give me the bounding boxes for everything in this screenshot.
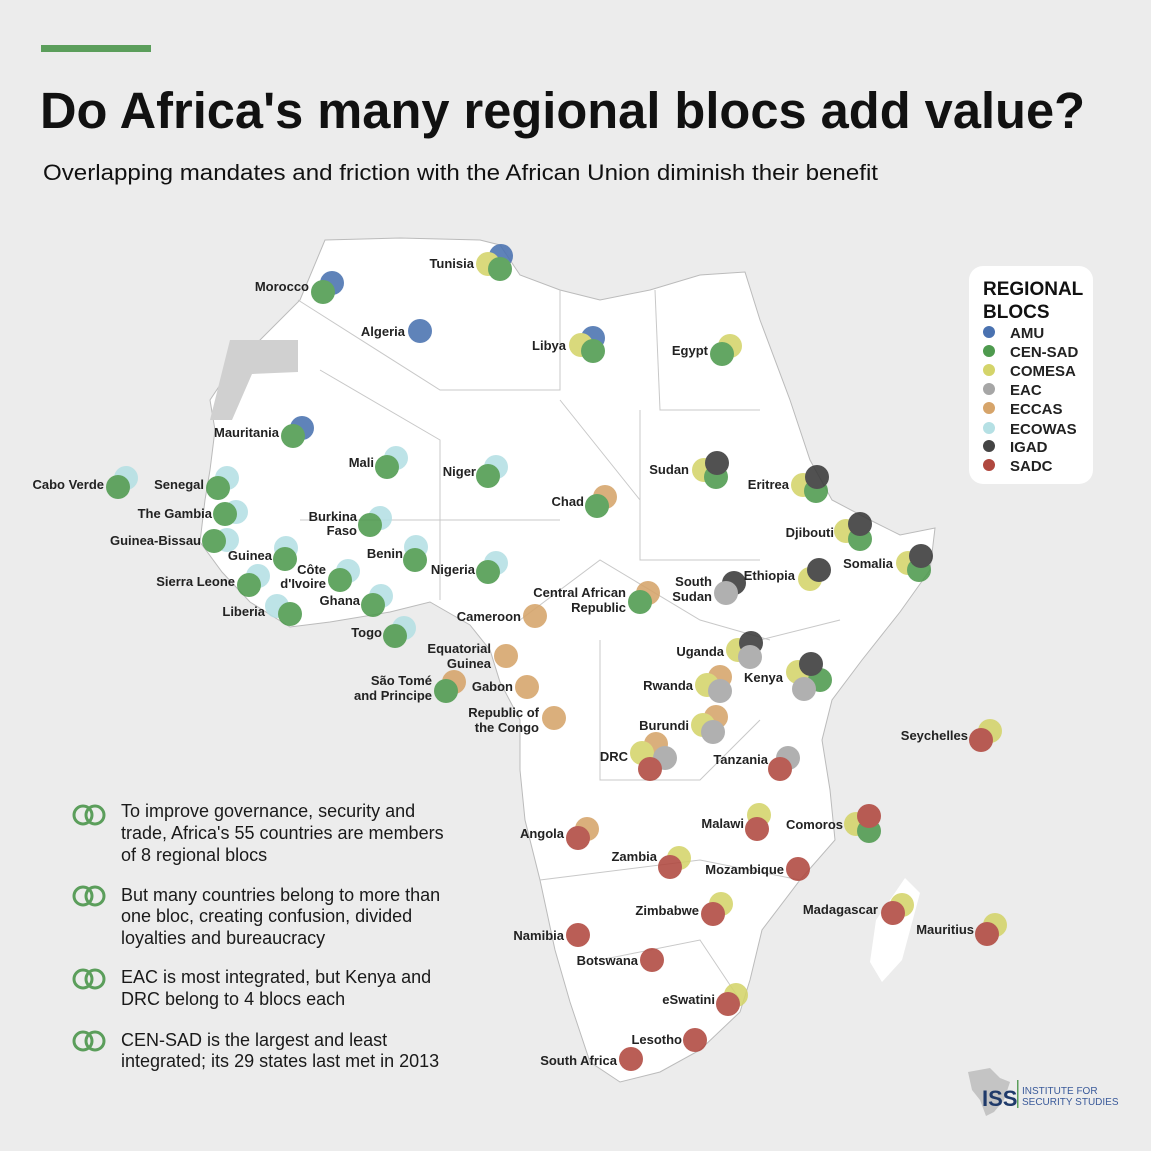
country labels: d'Ivoire xyxy=(280,576,326,591)
country labels: Tanzania xyxy=(713,752,769,767)
country labels: Ghana xyxy=(320,593,361,608)
legend: AMU xyxy=(1010,325,1044,342)
country labels: Comoros xyxy=(786,817,843,832)
bullet 3: DRC belong to 4 blocs each xyxy=(121,989,345,1009)
accent bar xyxy=(41,45,151,52)
bullet 1: of 8 regional blocs xyxy=(121,845,267,865)
country labels: Mali xyxy=(349,455,374,470)
country labels: Faso xyxy=(327,523,357,538)
legend: ECCAS xyxy=(1010,401,1063,418)
country labels: Somalia xyxy=(843,556,894,571)
country labels: Republic xyxy=(571,600,626,615)
country labels: Ethiopia xyxy=(744,568,796,583)
bullet 2: But many countries belong to more than xyxy=(121,885,440,905)
country labels: Namibia xyxy=(513,928,565,943)
country labels: Togo xyxy=(351,625,382,640)
legend: COMESA xyxy=(1010,363,1076,380)
country labels: The Gambia xyxy=(138,506,213,521)
bullet 2: one bloc, creating confusion, divided xyxy=(121,906,412,926)
country labels: Djibouti xyxy=(786,525,834,540)
country labels: Chad xyxy=(552,494,584,509)
legend: IGAD xyxy=(1010,439,1048,456)
country labels: Sierra Leone xyxy=(156,574,235,589)
logo: ISS: SECURITY STUDIES xyxy=(1022,1097,1119,1108)
bullet 3 xyxy=(74,967,431,1009)
country labels: Morocco xyxy=(255,279,309,294)
title: Do Africa's many regional blocs add value? xyxy=(40,82,1085,139)
country labels: Guinea xyxy=(447,656,492,671)
country labels: Seychelles xyxy=(901,728,968,743)
country labels: Egypt xyxy=(672,343,709,358)
bullet 2 xyxy=(74,885,440,948)
legend: EAC xyxy=(1010,382,1042,399)
bullet 4: integrated; its 29 states last met in 2013 xyxy=(121,1051,439,1071)
country labels: South Africa xyxy=(540,1053,618,1068)
country labels: Republic of xyxy=(468,705,540,720)
country labels: Zambia xyxy=(611,849,658,864)
country labels: Lesotho xyxy=(631,1032,682,1047)
country labels: Angola xyxy=(520,826,565,841)
legend: ECOWAS xyxy=(1010,421,1077,438)
map: Africa xyxy=(200,238,935,1082)
country labels: eSwatini xyxy=(662,992,715,1007)
country labels: Sudan xyxy=(649,462,689,477)
legend xyxy=(969,266,1093,484)
country labels: Guinea xyxy=(228,548,273,563)
country labels: Sudan xyxy=(672,589,712,604)
country labels: South xyxy=(675,574,712,589)
country labels: São Tomé xyxy=(371,673,432,688)
country labels xyxy=(32,256,974,1068)
country labels: Guinea-Bissau xyxy=(110,533,201,548)
country labels: Madagascar xyxy=(803,902,878,917)
country labels: Libya xyxy=(532,338,567,353)
country labels: Benin xyxy=(367,546,403,561)
country labels: Mozambique xyxy=(705,862,784,877)
logo: ISS: INSTITUTE FOR xyxy=(1022,1086,1098,1097)
country labels: the Congo xyxy=(475,720,539,735)
country labels: Mauritius xyxy=(916,922,974,937)
bullet 1: trade, Africa's 55 countries are members xyxy=(121,823,444,843)
country labels: Niger xyxy=(443,464,476,479)
country labels: Burkina xyxy=(309,509,358,524)
country labels: Tunisia xyxy=(429,256,475,271)
country labels: Liberia xyxy=(222,604,266,619)
legend: REGIONAL xyxy=(983,279,1084,300)
country labels: Cabo Verde xyxy=(32,477,104,492)
country labels: Gabon xyxy=(472,679,513,694)
subtitle: Overlapping mandates and friction with the African Union diminish their benefit xyxy=(43,160,878,185)
country labels: Eritrea xyxy=(748,477,790,492)
country labels: Burundi xyxy=(639,718,689,733)
bullet 3: EAC is most integrated, but Kenya and xyxy=(121,967,431,987)
country labels: DRC xyxy=(600,749,629,764)
country labels: Central African xyxy=(533,585,626,600)
country labels: Rwanda xyxy=(643,678,694,693)
legend: CEN-SAD xyxy=(1010,344,1079,361)
country labels: Nigeria xyxy=(431,562,476,577)
bullet 4: CEN-SAD is the largest and least xyxy=(121,1030,387,1050)
bullet 1: To improve governance, security and xyxy=(121,801,415,821)
bullet 2: loyalties and bureaucracy xyxy=(121,928,325,948)
logo: ISS: ISS xyxy=(982,1086,1017,1111)
country labels: Zimbabwe xyxy=(635,903,699,918)
country labels: Senegal xyxy=(154,477,204,492)
country labels: Mauritania xyxy=(214,425,280,440)
country labels: Kenya xyxy=(744,670,784,685)
country labels: Malawi xyxy=(701,816,744,831)
country labels: Uganda xyxy=(676,644,725,659)
logo: ISS xyxy=(968,1068,1119,1116)
legend: BLOCS xyxy=(983,302,1050,323)
country labels: Côte xyxy=(297,562,326,577)
country labels: and Principe xyxy=(354,688,432,703)
key points xyxy=(74,801,444,1071)
legend: SADC xyxy=(1010,458,1053,475)
bullet 4 xyxy=(74,1030,439,1071)
country labels: Cameroon xyxy=(457,609,521,624)
country labels: Algeria xyxy=(361,324,406,339)
country membership dots xyxy=(106,244,1007,1071)
country labels: Botswana xyxy=(577,953,639,968)
bullet 1 xyxy=(74,801,444,865)
country labels: Equatorial xyxy=(427,641,491,656)
